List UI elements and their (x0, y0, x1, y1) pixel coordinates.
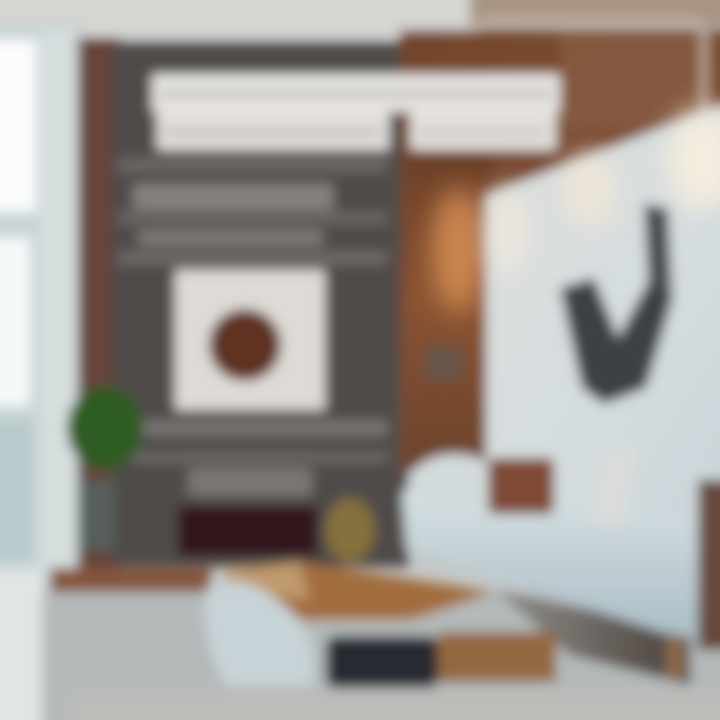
wall ornament (426, 346, 462, 380)
white armchair (205, 581, 314, 686)
dark V artwork (560, 204, 674, 404)
frame outline top right (480, 20, 704, 120)
plant (67, 386, 143, 550)
console furniture (178, 468, 375, 562)
wall light glow (432, 188, 484, 312)
brown wall stripe (78, 38, 120, 578)
grey panel wall (112, 42, 408, 567)
sofa (402, 454, 720, 680)
shadow under sofa (495, 590, 690, 685)
white art wall (486, 105, 720, 530)
dark ottoman (326, 636, 438, 688)
poster with circle (175, 270, 325, 410)
cushions (488, 446, 638, 528)
ceiling band (0, 0, 720, 36)
floor edge wood (50, 568, 210, 600)
headline block (152, 74, 560, 150)
coffee table (225, 562, 556, 682)
subheading lines (133, 184, 333, 246)
left window (0, 20, 82, 600)
rug and floor (0, 570, 720, 720)
right wood wall (400, 30, 720, 470)
